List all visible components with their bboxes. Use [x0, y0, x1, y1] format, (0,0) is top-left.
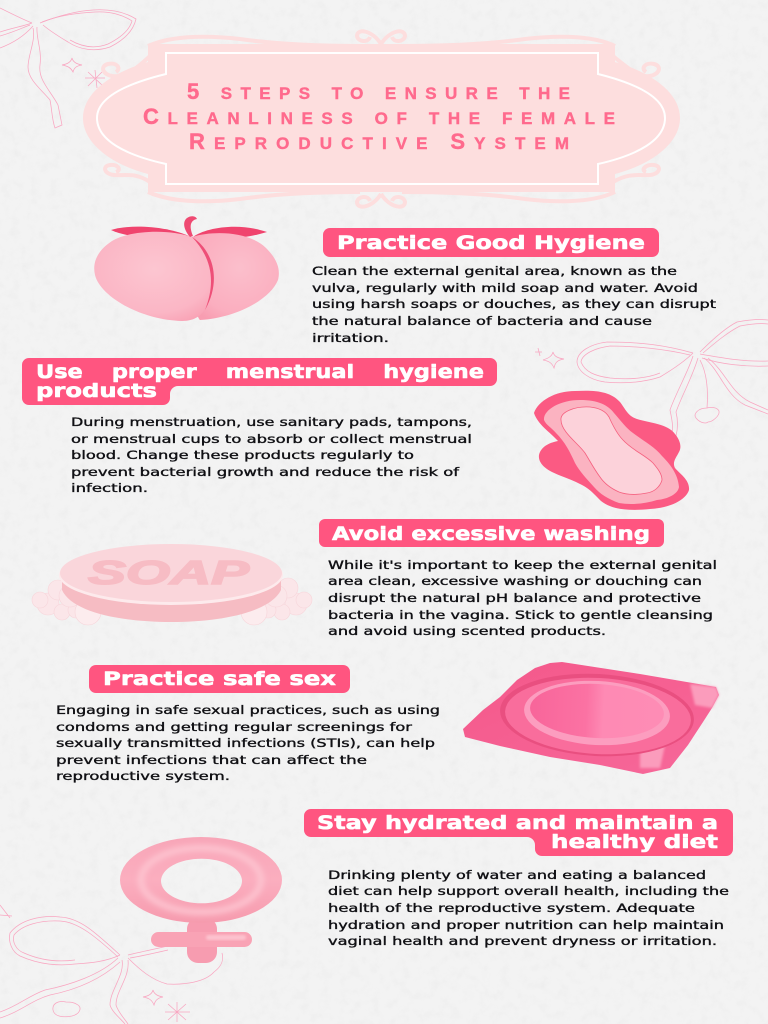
text: stay hydrated: diet can help support overall health, including the [328, 884, 729, 898]
title text: C LEANLINESS OF THE FEMALE [143, 104, 615, 129]
heading pill: avoid excessive washing [319, 519, 664, 547]
text: menstrual hygiene: blood. Change these products regularly to [71, 448, 414, 462]
text: avoid excessive washing: bacteria in the vagina. Stick to gentle cleansing [328, 608, 713, 622]
text: practice safe sex: sexually transmitted infections (STIs), can help [56, 736, 435, 750]
text: practice safe sex: Engaging in safe sexual practices, such as using [56, 703, 440, 717]
text: practice good hygiene [312, 264, 717, 345]
text: stay hydrated: hydration and proper nutrition can help maintain [328, 918, 724, 932]
text: menstrual hygiene: or menstrual cups to absorb or collect menstrual [71, 432, 472, 446]
icon: peach [94, 216, 279, 321]
text: avoid excessive washing: disrupt the natural pH balance and protective [328, 591, 701, 605]
ribbon: right [535, 320, 768, 436]
text: practice good hygiene: vulva, regularly with mild soap and water. Avoid [312, 281, 698, 295]
text: menstrual hygiene [71, 415, 472, 495]
icon: sanitary pad [534, 391, 689, 510]
heading pill: practice good hygiene: Practice Good Hygiene [337, 232, 645, 254]
heading pill: practice safe sex [89, 665, 350, 693]
text: avoid excessive washing [328, 558, 717, 638]
text: practice safe sex: prevent infections that can affect the [56, 753, 367, 767]
text: menstrual hygiene: prevent bacterial growth and reduce the risk of [71, 465, 460, 479]
text: avoid excessive washing: and avoid using scented products. [328, 624, 606, 638]
text: practice safe sex: condoms and getting regular screenings for [56, 720, 412, 734]
heading pill: stay hydrated: healthy diet [551, 831, 718, 853]
text: stay hydrated: Drinking plenty of water and eating a balanced [328, 868, 706, 882]
text: practice good hygiene: using harsh soaps or douches, as they can disrupt [312, 297, 717, 311]
title text: 5 STEPS TO ENSURE THE [187, 79, 570, 104]
heading pill: avoid excessive washing: Avoid excessive washing [332, 523, 650, 545]
heading pill: use proper menstrual hygiene products [22, 358, 497, 405]
soap suds [32, 578, 312, 625]
text: stay hydrated: health of the reproductive system. Adequate [328, 901, 695, 915]
text: practice good hygiene: irritation. [312, 331, 389, 345]
text: stay hydrated [328, 868, 729, 948]
heading pill: stay hydrated: Stay hydrated and maintain a [317, 812, 718, 834]
text: avoid excessive washing: area clean, excessive washing or douching can [328, 574, 702, 588]
icon: female symbol [120, 837, 282, 963]
icon: condom packet [463, 662, 719, 774]
plaque ornaments [103, 31, 659, 207]
icon: soap [32, 544, 312, 625]
title text: R EPRODUCTIVE S YSTEM [189, 129, 569, 154]
heading pill: practice safe sex: Practice safe sex [103, 668, 336, 690]
ribbon: bottom left [0, 905, 223, 1024]
soap label: SOAP [88, 554, 251, 591]
heading pill: use proper menstrual hygiene products: products [36, 380, 157, 402]
text: practice safe sex: reproductive system. [56, 769, 230, 783]
text: stay hydrated: vaginal health and prevent dryness or irritation. [328, 934, 717, 948]
text: menstrual hygiene: infection. [71, 481, 148, 495]
heading pill: practice good hygiene [323, 228, 659, 257]
text: practice good hygiene: Clean the external genital area, known as the [312, 264, 677, 278]
ribbon: top left [0, 8, 136, 128]
text: avoid excessive washing: While it's important to keep the external genital [328, 558, 717, 572]
title text [143, 79, 615, 154]
text: practice good hygiene: the natural balance of bacteria and cause [312, 314, 652, 328]
heading pill: use proper menstrual hygiene products: Use proper menstrual hygiene [36, 361, 484, 383]
title plaque [83, 31, 680, 207]
text: practice safe sex [56, 703, 440, 783]
heading pill: stay hydrated [304, 809, 733, 856]
text: menstrual hygiene: During menstruation, use sanitary pads, tampons, [71, 415, 472, 429]
